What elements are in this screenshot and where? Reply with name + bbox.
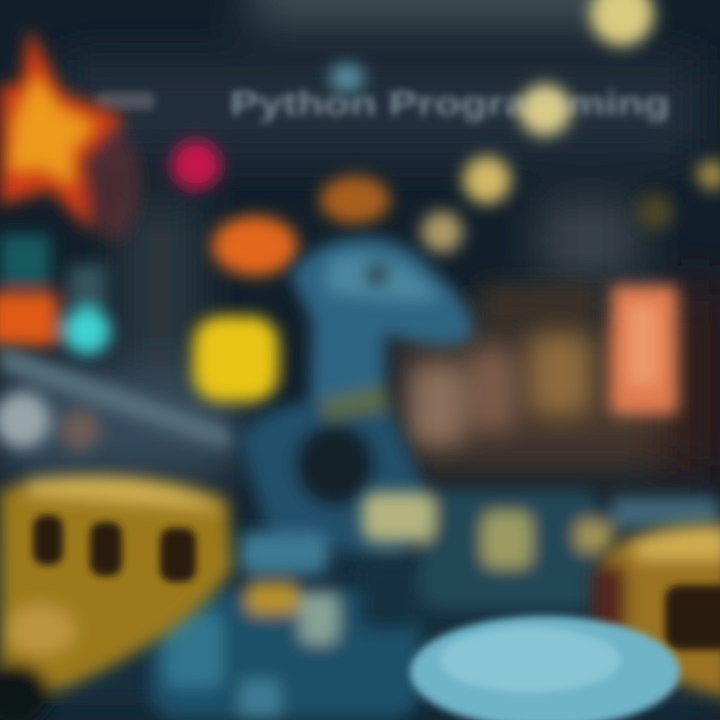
heading: blurred title text: Python Programming [230, 85, 670, 123]
sign: right orange panel [610, 285, 678, 415]
marker: yellow square light [193, 316, 279, 402]
icon: small triangle above title [329, 63, 365, 93]
marker: amber light [320, 176, 390, 224]
road: left rail streaks [0, 345, 230, 450]
marker: pink light [171, 140, 221, 190]
sign: left neon orange and cyan [0, 235, 111, 355]
buildings: blurred tan shops [410, 285, 600, 445]
vehicle: left yellow bus [0, 475, 232, 720]
marker: cream lights [421, 0, 720, 253]
heading: blurred title text [95, 85, 670, 123]
marker: orange light [212, 216, 298, 276]
machinery: blue and yellow parts [150, 490, 720, 720]
icon: glowing star [0, 28, 140, 240]
bus windows [33, 515, 196, 582]
dinosaur: blue robot figure [240, 237, 471, 560]
vehicle: right yellow bus [592, 524, 720, 700]
disc: pale blue platform [410, 616, 680, 720]
bus window [665, 585, 720, 650]
